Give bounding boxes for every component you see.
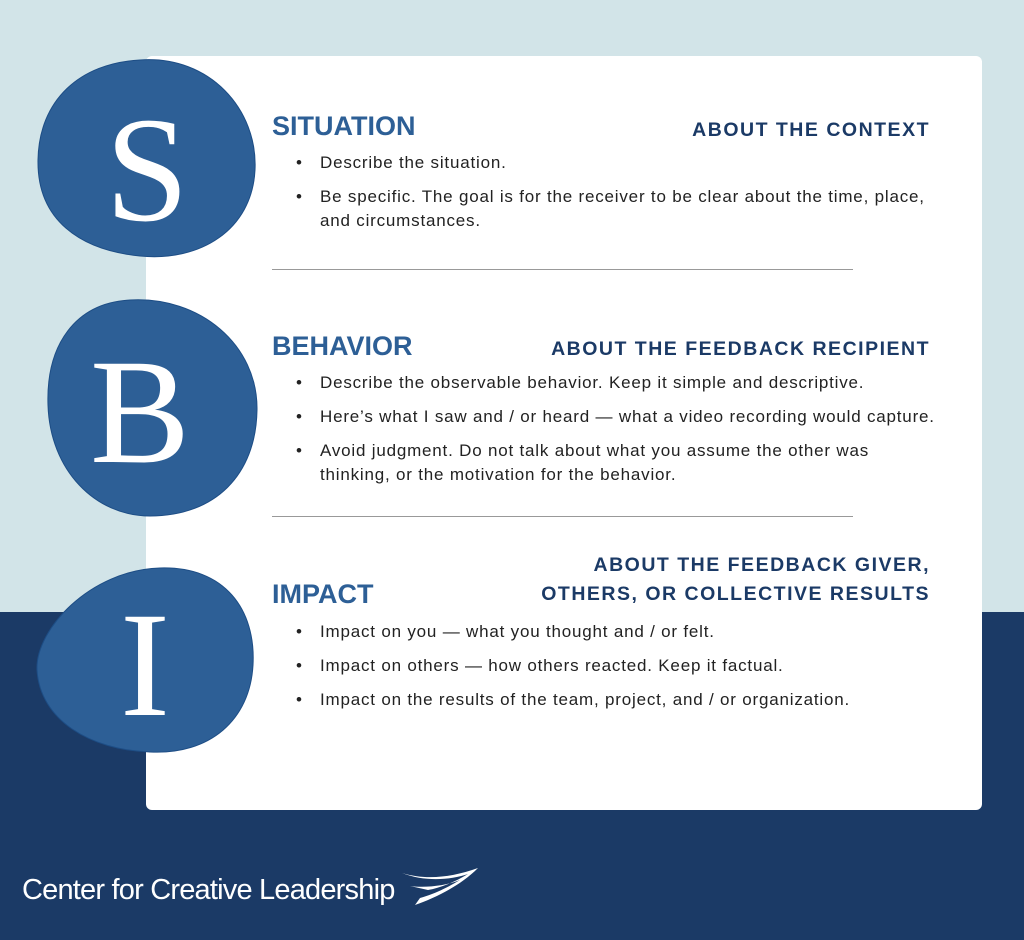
blob S [38,60,255,257]
heading: impact: IMPACT [272,579,374,609]
blob I: I [120,582,170,748]
heading: behavior: BEHAVIOR [272,331,413,361]
subheading: giver: OTHERS, OR COLLECTIVE RESULTS [541,583,930,605]
bullets: behavior [296,373,935,484]
bullets: behavior: Describe the observable behavior. Keep it simple and descriptive. [320,373,864,392]
icon: logo swoosh [402,868,478,905]
bullets: behavior: Avoid judgment. Do not talk about what you assume the other was thinking, or the motivation for the behavior. [320,441,869,484]
background top [0,0,1024,612]
heading: situation: SITUATION [272,111,416,141]
bullets: impact: Impact on others — how others reacted. Keep it factual. [320,656,784,675]
blob S: S [105,87,189,253]
subheading: context: ABOUT THE CONTEXT [692,119,930,141]
bullets: situation [296,153,925,230]
subheading: giver [541,554,930,605]
blob I [37,568,253,752]
subheading: recipient: ABOUT THE FEEDBACK RECIPIENT [551,338,930,360]
bullets: behavior: Here’s what I saw and / or heard — what a video recording would capture. [320,407,935,426]
logo: Center for Creative Leadership [22,874,395,906]
logo [22,868,478,906]
bullets: impact: Impact on you — what you thought and / or felt. [320,622,715,641]
bullets: situation: Describe the situation. [320,153,507,172]
letter blobs [36,59,258,753]
blob B: B [90,329,190,495]
bullets: impact: Impact on the results of the team, project, and / or organization. [320,690,850,709]
blob B [48,300,257,516]
subheading: giver: ABOUT THE FEEDBACK GIVER, [593,554,930,576]
white card [146,56,982,810]
bullets: impact [296,622,850,709]
bullets: situation: Be specific. The goal is for the receiver to be clear about the time, place, and circumstances. [320,187,925,230]
